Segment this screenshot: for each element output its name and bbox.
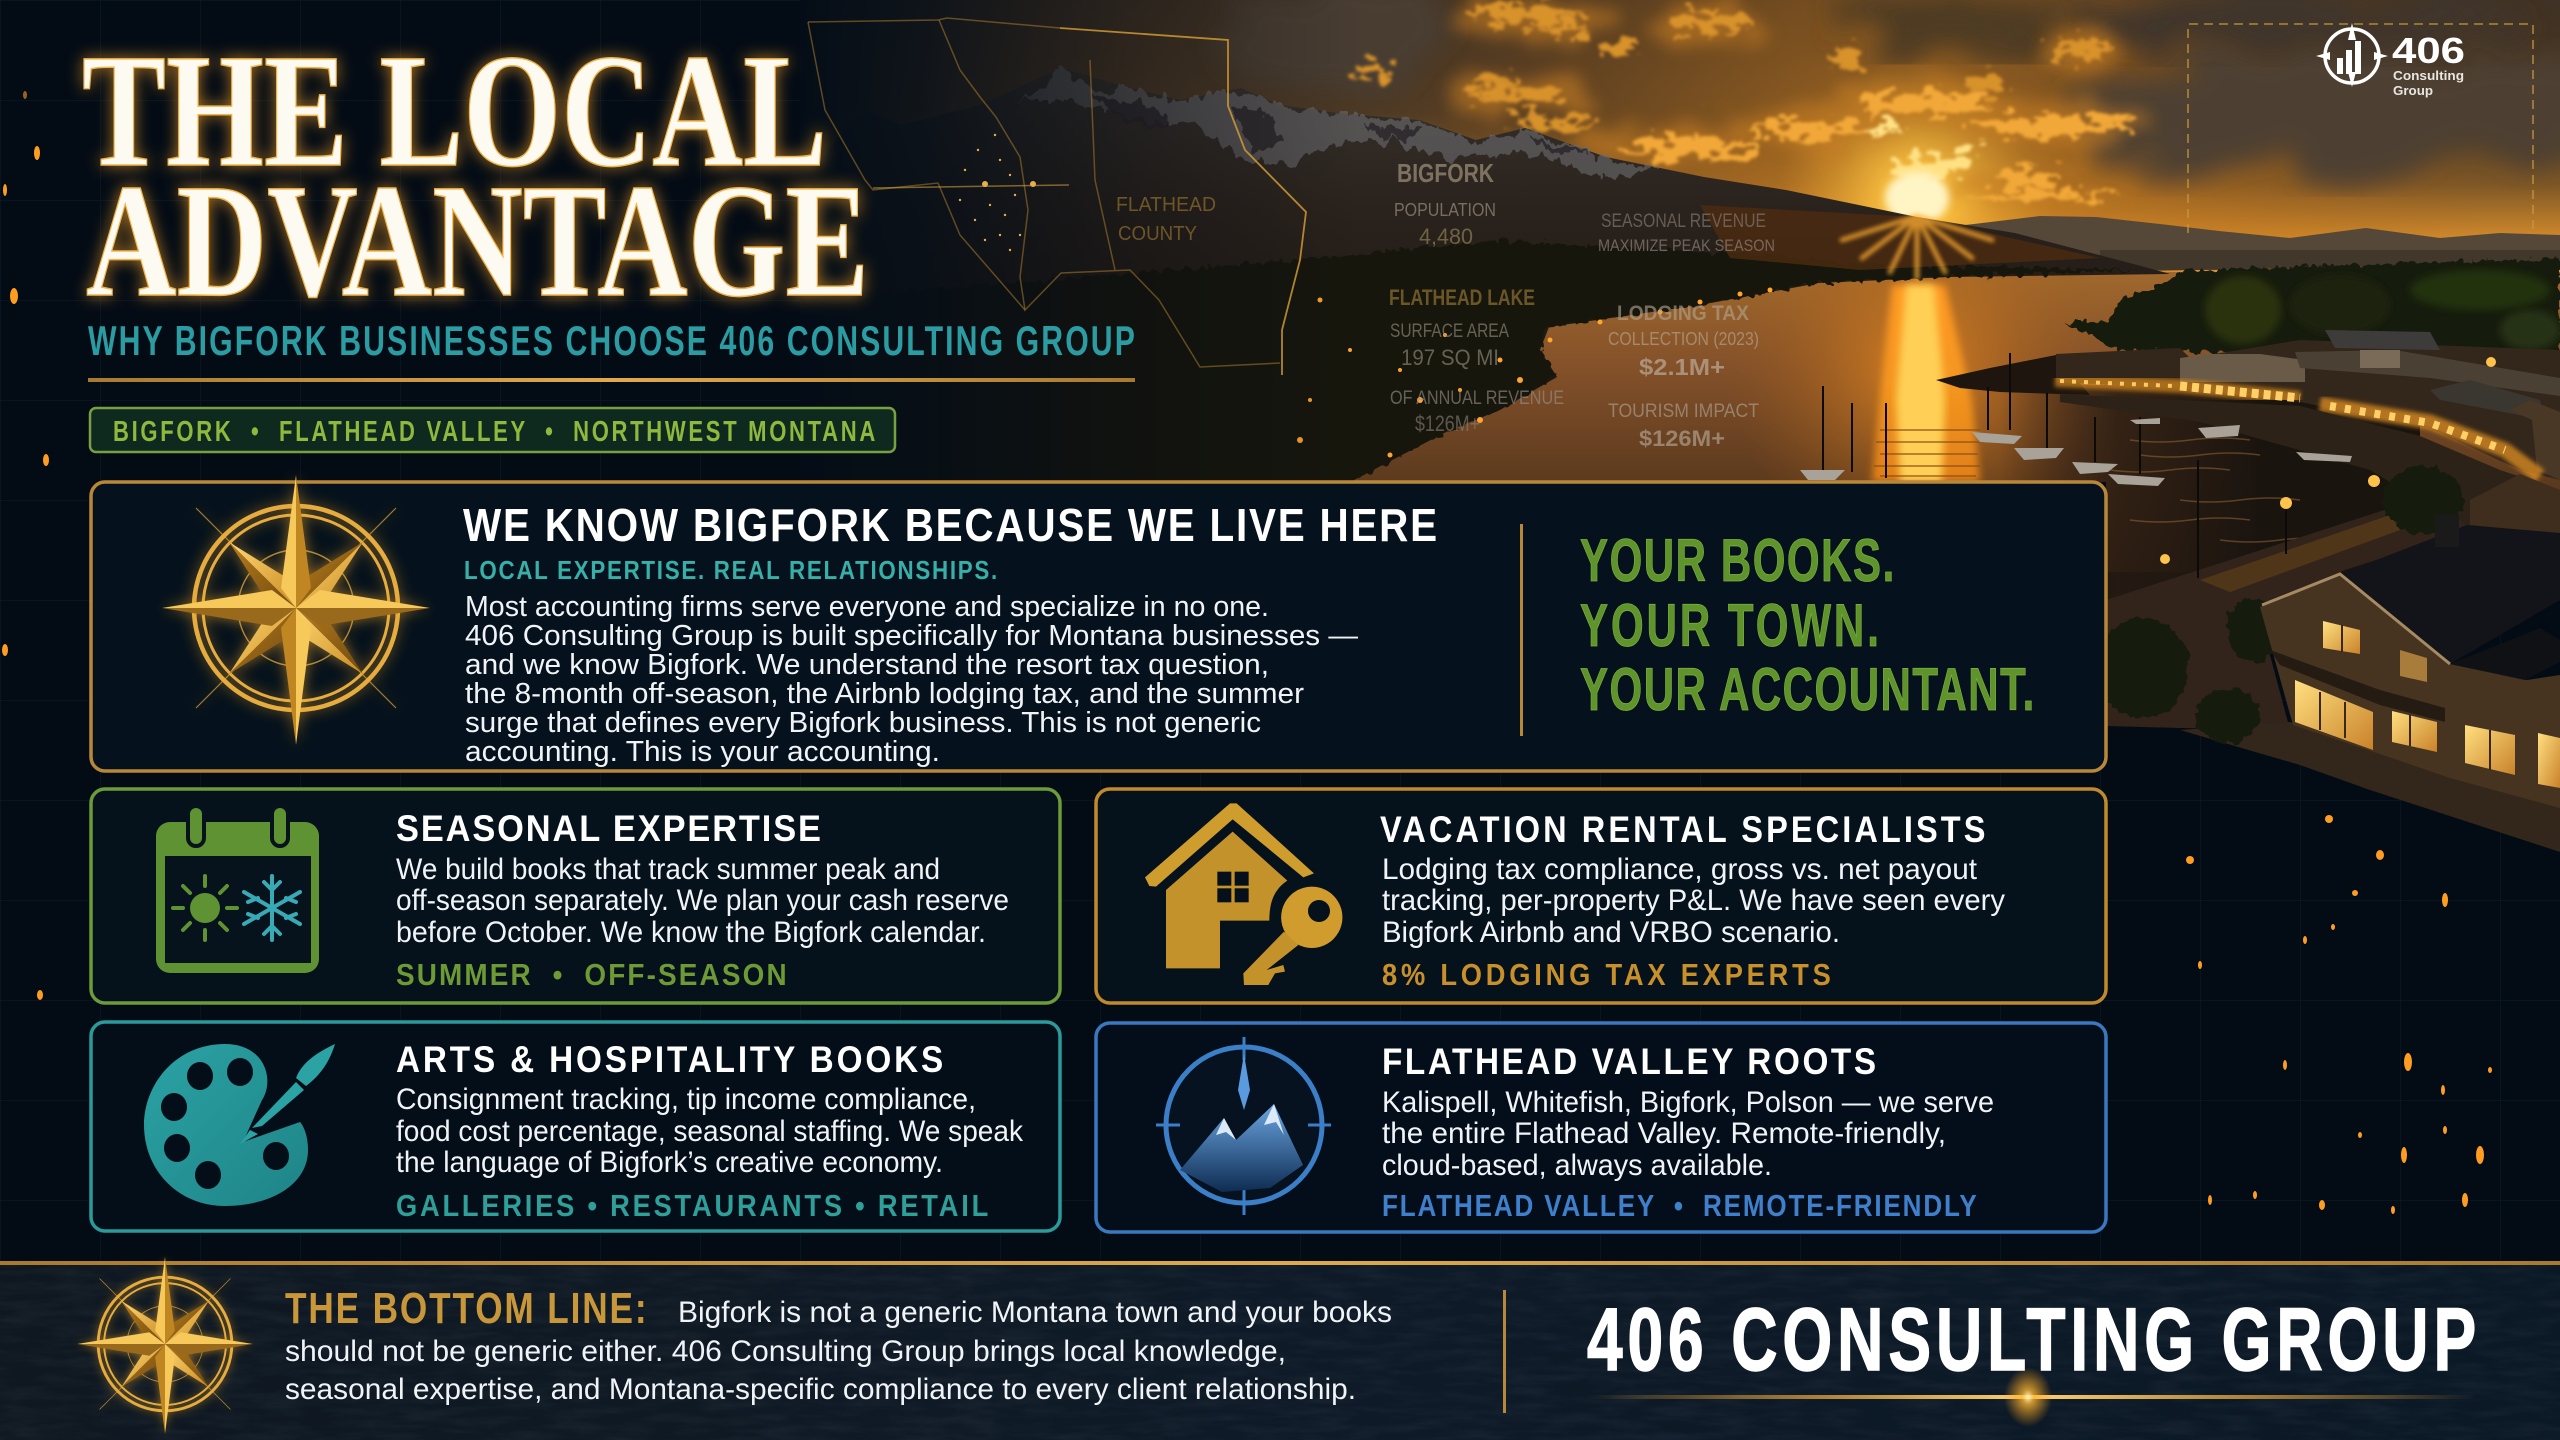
- shoreline lights: [1297, 288, 1772, 458]
- card tag: SUMMER • OFF-SEASON: [396, 958, 787, 992]
- landscape photo: sunset over Flathead Lake: [800, 0, 2560, 852]
- logo: 406 Consulting Group: 406: [2392, 30, 2465, 71]
- bottom line text: Bigfork is not a generic Montana town and your books: [678, 1296, 1392, 1329]
- faint overlay labels: FLATHEAD LAKE: [1389, 285, 1535, 310]
- card body: Kalispell, Whitefish, Bigfork, Polson — we serve: [1382, 1086, 1994, 1119]
- sun rays: [1842, 216, 1992, 278]
- faint county map of Flathead Valley: [808, 18, 1306, 375]
- card body: before October. We know the Bigfork calendar.: [396, 916, 986, 949]
- icon: logo compass with bars: [2316, 23, 2388, 87]
- card tag: 8% LODGING TAX EXPERTS: [1382, 958, 1831, 992]
- soft cloud glow: [1450, 0, 2150, 204]
- sailboats and masts: [1800, 353, 2352, 578]
- card body: food cost percentage, seasonal staffing. We speak: [396, 1115, 1024, 1148]
- snow band: [1020, 70, 1660, 178]
- faint overlay labels: 197 SQ MI: [1401, 345, 1499, 370]
- sun: [1885, 172, 1949, 224]
- promontory and dock: [1936, 355, 2090, 395]
- faint overlay labels: SEASONAL REVENUE: [1601, 211, 1766, 232]
- card body: the language of Bigfork’s creative economy.: [396, 1146, 943, 1179]
- brand underline with flare: [1587, 1367, 2476, 1427]
- bottom line text: [285, 1284, 1392, 1406]
- lodge: [2260, 515, 2560, 808]
- card body: [1382, 853, 2005, 949]
- panel body text: accounting. This is your accounting.: [465, 736, 940, 768]
- logo placeholder frame: [2188, 24, 2533, 233]
- card body: tracking, per-property P&L. We have seen every: [1382, 884, 2005, 917]
- slogan: YOUR BOOKS.: [1580, 527, 1894, 594]
- faint overlay labels: $126M+: [1415, 411, 1480, 436]
- panel: Flathead Valley roots: [1096, 1023, 2106, 1232]
- card heading: ARTS & HOSPITALITY BOOKS: [396, 1039, 943, 1080]
- panel: arts and hospitality books: [91, 1022, 1060, 1231]
- quay and road: [2060, 394, 2560, 852]
- street lamps: [2160, 357, 2496, 564]
- trees: [2097, 466, 2463, 744]
- icon: gold compass rose: [162, 475, 430, 745]
- faint overlay labels: COUNTY: [1118, 223, 1197, 245]
- faint overlay labels: LODGING TAX: [1617, 302, 1749, 325]
- icon: bottom compass rose: [77, 1257, 253, 1434]
- sky: [800, 0, 2560, 280]
- embers: [2, 91, 2492, 1214]
- faint overlay labels: MAXIMIZE PEAK SEASON: [1598, 236, 1775, 255]
- panel body text: 406 Consulting Group is built specifically for Montana businesses —: [465, 620, 1358, 652]
- faint overlay labels: 4,480: [1419, 224, 1473, 249]
- card body: off-season separately. We plan your cash reserve: [396, 884, 1009, 917]
- card tag: FLATHEAD VALLEY • REMOTE-FRIENDLY: [1382, 1189, 1977, 1224]
- waterfront lights: [2055, 380, 2540, 476]
- faint overlay labels: $126M+: [1639, 426, 1725, 451]
- panel: vacation rental specialists: [1096, 789, 2106, 1003]
- lake: [1300, 272, 2560, 572]
- card body: Consignment tracking, tip income compliance,: [396, 1083, 976, 1116]
- location badge: [90, 408, 895, 452]
- panel body text: surge that defines every Bigfork business. This is not generic: [465, 707, 1261, 739]
- card body: Lodging tax compliance, gross vs. net payout: [1382, 853, 1978, 886]
- logo: 406 Consulting Group: [2316, 23, 2465, 98]
- faint overlay labels: OF ANNUAL REVENUE: [1390, 388, 1564, 409]
- county lights: [959, 134, 1036, 251]
- icon: calendar with sun and snowflake: [156, 806, 319, 973]
- card body: [396, 1083, 1024, 1179]
- card body: [1382, 1086, 1994, 1182]
- faint overlay labels: FLATHEAD: [1116, 194, 1216, 216]
- panel subheading: LOCAL EXPERTISE. REAL RELATIONSHIPS.: [464, 556, 997, 585]
- card body: Bigfork Airbnb and VRBO scenario.: [1382, 916, 1840, 949]
- faint overlay labels: SURFACE AREA: [1390, 321, 1509, 342]
- panel body text: the 8-month off-season, the Airbnb lodging tax, and the summer: [465, 678, 1304, 710]
- panel body text: and we know Bigfork. We understand the resort tax question,: [465, 649, 1269, 681]
- slogan: YOUR ACCOUNTANT.: [1580, 656, 2034, 723]
- right shoreline forest: [2064, 256, 2560, 355]
- card body: We build books that track summer peak and: [396, 853, 940, 886]
- logo: 406 Consulting Group: Group: [2393, 84, 2433, 98]
- sunlit cloud streaks: [1354, 1, 2130, 201]
- icon: house and key: [1145, 803, 1342, 985]
- slogan: [1580, 527, 2034, 723]
- bottom line text: THE BOTTOM LINE:: [285, 1284, 647, 1333]
- faint overlay labels: TOURISM IMPACT: [1608, 401, 1759, 422]
- bottom line text: should not be generic either. 406 Consulting Group brings local knowledge,: [285, 1335, 1286, 1368]
- icon: palette and brush: [144, 1044, 335, 1206]
- title: ADVANTAGE: [86, 152, 869, 331]
- harbor water: [2000, 385, 2420, 610]
- faint overlay labels: POPULATION: [1394, 200, 1496, 220]
- brand wordmark: 406 CONSULTING GROUP: [1587, 1291, 2476, 1390]
- left fade of the photo: [800, 0, 1360, 482]
- bottom band: [0, 1257, 2560, 1440]
- forested lower slopes: [1066, 238, 2141, 478]
- title: THE LOCAL: [82, 22, 827, 201]
- subtitle: WHY BIGFORK BUSINESSES CHOOSE 406 CONSULTING GROUP: [88, 317, 1135, 364]
- card tag: GALLERIES • RESTAURANTS • RETAIL: [396, 1189, 988, 1223]
- icon: blue compass with mountains: [1156, 1037, 1331, 1215]
- panel body text: [465, 591, 1358, 768]
- card body: cloud-based, always available.: [1382, 1149, 1772, 1182]
- panel body text: Most accounting firms serve everyone and specialize in no one.: [465, 591, 1269, 623]
- faint overlay labels: COLLECTION (2023): [1608, 329, 1759, 349]
- card heading: SEASONAL EXPERTISE: [396, 808, 821, 849]
- panel: we know Bigfork: [91, 475, 2106, 771]
- card heading: VACATION RENTAL SPECIALISTS: [1380, 809, 1985, 850]
- title rule: [88, 378, 1135, 382]
- location badge: BIGFORK • FLATHEAD VALLEY • NORTHWEST MONTANA: [113, 416, 875, 448]
- title: [82, 22, 869, 331]
- card heading: FLATHEAD VALLEY ROOTS: [1382, 1041, 1876, 1082]
- waterfront buildings: [2056, 330, 2560, 480]
- panel: seasonal expertise: [91, 789, 1060, 1003]
- panel heading: WE KNOW BIGFORK BECAUSE WE LIVE HERE: [463, 501, 1437, 552]
- bottom line text: seasonal expertise, and Montana-specific compliance to every client relationship.: [285, 1373, 1356, 1406]
- faint overlay labels: [1116, 158, 1775, 451]
- card body: [396, 853, 1009, 949]
- main mountain range: [800, 68, 2170, 482]
- card body: the entire Flathead Valley. Remote-friendly,: [1382, 1117, 1946, 1150]
- faint overlay labels: BIGFORK: [1397, 158, 1494, 188]
- logo: 406 Consulting Group: Consulting: [2393, 69, 2464, 83]
- faint overlay labels: $2.1M+: [1639, 354, 1725, 380]
- slogan: YOUR TOWN.: [1580, 592, 1879, 659]
- distant ridge: [1965, 216, 2560, 271]
